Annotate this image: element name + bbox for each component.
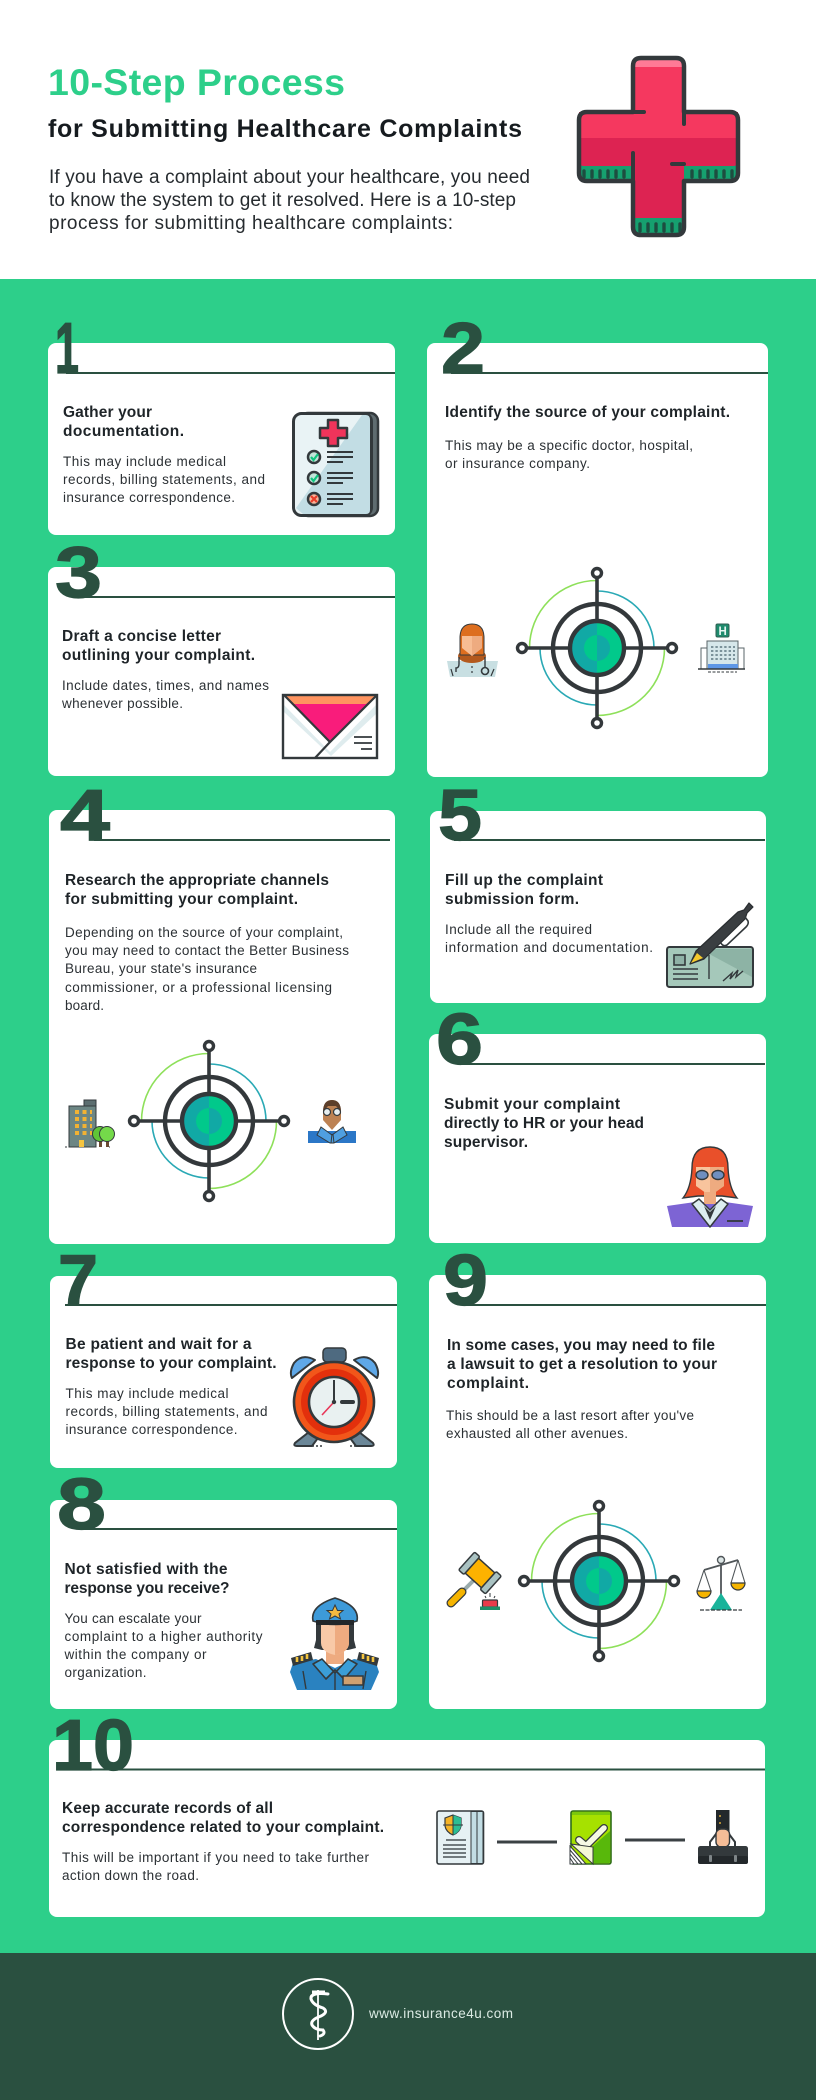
icon: approved document bbox=[570, 1811, 611, 1864]
panel: step 10 bbox=[49, 1706, 765, 1917]
step 6 text: directly to HR or your head bbox=[444, 1115, 644, 1132]
step 3 text: Draft a concise letter bbox=[62, 628, 221, 645]
step 4 text: Bureau, your state's insurance bbox=[65, 961, 257, 976]
target diagram bbox=[130, 1042, 288, 1200]
step 1 text: Gather your bbox=[63, 404, 152, 421]
step 7 text: Be patient and wait for a bbox=[66, 1336, 252, 1353]
icon: insurance document bbox=[437, 1811, 484, 1864]
website url: www.insurance4u.com bbox=[368, 2006, 513, 2021]
step 4 text: Research the appropriate channels bbox=[65, 872, 329, 889]
number 6: 6 bbox=[436, 1000, 483, 1080]
step 9 text: complaint. bbox=[447, 1375, 529, 1392]
panel: step 5 bbox=[430, 776, 766, 1003]
intro paragraph: process for submitting healthcare complaints: bbox=[49, 213, 453, 234]
step 8 text: response you receive? bbox=[64, 1580, 230, 1597]
step 4 text: you may need to contact the Better Business bbox=[65, 943, 349, 958]
step 2 text: Identify the source of your complaint. bbox=[445, 404, 730, 421]
step 9 text: a lawsuit to get a resolution to your bbox=[447, 1356, 717, 1373]
icon: envelope bbox=[283, 695, 377, 758]
step 7 text: records, billing statements, and bbox=[66, 1404, 268, 1419]
icon: police officer bbox=[290, 1598, 379, 1690]
green background panel bbox=[0, 279, 816, 1953]
step 5 text: information and documentation. bbox=[445, 940, 653, 955]
step 1 text: records, billing statements, and bbox=[63, 472, 265, 487]
step 10 text: This will be important if you need to take further bbox=[62, 1850, 370, 1865]
panel: step 7 bbox=[50, 1241, 397, 1468]
number 7: 7 bbox=[58, 1241, 98, 1321]
icon: office building and trees bbox=[65, 1100, 114, 1147]
step 1 text: insurance correspondence. bbox=[63, 490, 235, 505]
step 6 text: supervisor. bbox=[444, 1134, 528, 1151]
number 2: 2 bbox=[441, 309, 485, 389]
icon: woman with glasses bbox=[667, 1147, 753, 1227]
target diagram bbox=[520, 1502, 678, 1660]
number 3: 3 bbox=[55, 533, 102, 613]
icon: medical checklist bbox=[294, 413, 378, 516]
panel: step 6 bbox=[429, 1000, 766, 1243]
number 5: 5 bbox=[438, 776, 482, 856]
panel: step 8 bbox=[50, 1465, 397, 1709]
icon: rod of Asclepius logo bbox=[283, 1979, 353, 2049]
step 9 text: In some cases, you may need to file bbox=[447, 1337, 715, 1354]
number 9: 9 bbox=[443, 1241, 488, 1321]
step 1 text: documentation. bbox=[63, 423, 184, 440]
step 7 text: insurance correspondence. bbox=[66, 1422, 238, 1437]
footer panel bbox=[0, 1953, 816, 2100]
number 1: 1 bbox=[55, 309, 79, 389]
step 8 text: You can escalate your bbox=[64, 1611, 202, 1626]
header panel bbox=[0, 0, 816, 279]
target diagram bbox=[518, 568, 676, 728]
step 5 text: submission form. bbox=[445, 891, 579, 908]
icon: scales of justice bbox=[697, 1556, 745, 1610]
step 5 text bbox=[445, 872, 653, 955]
step 9 text: exhausted all other avenues. bbox=[446, 1426, 628, 1441]
subtitle: for Submitting Healthcare Complaints bbox=[48, 115, 522, 143]
intro paragraph: to know the system to get it resolved. Here is a 10-step bbox=[49, 190, 516, 211]
icon: doctor bbox=[447, 624, 498, 677]
panel: step 1 bbox=[48, 309, 395, 535]
step 8 text bbox=[64, 1561, 263, 1680]
icon: gavel bbox=[451, 1552, 501, 1610]
step 7 text: This may include medical bbox=[66, 1386, 228, 1401]
step 4 text: for submitting your complaint. bbox=[65, 891, 298, 908]
step 9 text bbox=[446, 1337, 717, 1441]
icon: hospital: H bbox=[718, 626, 727, 638]
panel: step 9 bbox=[429, 1241, 766, 1709]
intro paragraph: If you have a complaint about your healthcare, you need bbox=[49, 167, 530, 188]
step 7 text bbox=[66, 1336, 276, 1437]
step 7 text: response to your complaint. bbox=[66, 1355, 276, 1372]
step 4 text: Depending on the source of your complaint, bbox=[65, 925, 343, 940]
step 8 text: Not satisfied with the bbox=[64, 1561, 228, 1578]
step 6 text: Submit your complaint bbox=[444, 1096, 620, 1113]
step 4 text bbox=[65, 872, 349, 1013]
number 4: 4 bbox=[60, 776, 110, 856]
connector line bbox=[497, 1840, 557, 1844]
step 8 text: within the company or bbox=[64, 1647, 207, 1662]
step 4 text: commissioner, or a professional licensing bbox=[65, 980, 332, 995]
connector line bbox=[625, 1838, 685, 1842]
title: 10-Step Process bbox=[48, 61, 345, 103]
icon: pen signing a check bbox=[667, 903, 753, 987]
intro paragraph bbox=[49, 167, 530, 234]
step 6 text bbox=[444, 1096, 644, 1151]
icon: hand holding briefcase bbox=[698, 1810, 748, 1864]
icon: alarm clock bbox=[291, 1348, 378, 1446]
step 9 text: This should be a last resort after you've bbox=[446, 1408, 694, 1423]
step 4 text: board. bbox=[65, 998, 104, 1013]
icon: man with glasses bbox=[308, 1100, 356, 1143]
panel: step 3 bbox=[48, 533, 395, 776]
step 8 text: complaint to a higher authority bbox=[64, 1629, 263, 1644]
step 5 text: Fill up the complaint bbox=[445, 872, 603, 889]
step 10 text bbox=[62, 1800, 384, 1883]
icon: hospital bbox=[698, 624, 745, 672]
step 10 text: action down the road. bbox=[62, 1868, 199, 1883]
step 10 text: correspondence related to your complaint. bbox=[62, 1819, 384, 1836]
icon: red medical cross bbox=[579, 58, 738, 235]
step 3 text: outlining your complaint. bbox=[62, 647, 255, 664]
step 1 text: This may include medical bbox=[63, 454, 226, 469]
step 3 text bbox=[61, 628, 269, 711]
step 1 text bbox=[63, 404, 265, 505]
step 2 text bbox=[445, 404, 730, 471]
panel: step 4 bbox=[49, 776, 395, 1244]
step 5 text: Include all the required bbox=[445, 922, 592, 937]
step 10 text: Keep accurate records of all bbox=[62, 1800, 273, 1817]
step 3 text: whenever possible. bbox=[61, 696, 183, 711]
step 2 text: or insurance company. bbox=[445, 456, 590, 471]
step 2 text: This may be a specific doctor, hospital, bbox=[445, 438, 693, 453]
number 10: 10 bbox=[52, 1706, 134, 1786]
panel: step 2 bbox=[427, 309, 768, 777]
number 8: 8 bbox=[57, 1465, 106, 1545]
step 8 text: organization. bbox=[64, 1665, 146, 1680]
step 3 text: Include dates, times, and names bbox=[62, 678, 269, 693]
